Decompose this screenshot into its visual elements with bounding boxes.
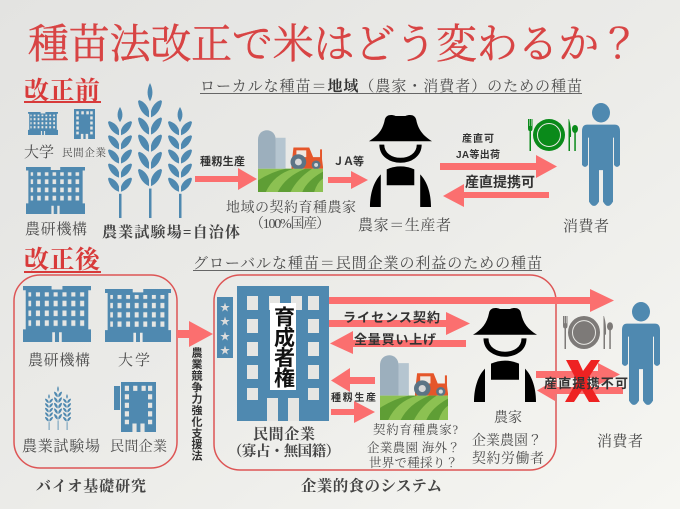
- arrow: seed production: [195, 168, 257, 190]
- icon: university: [28, 112, 58, 135]
- icon: university: [105, 289, 171, 342]
- heading: before revision: 改正前: [24, 77, 100, 105]
- label: breeder rights: 育成者権: [272, 306, 295, 388]
- panel: basic bio research: [14, 275, 177, 468]
- icon: stars sign: ★: [220, 303, 230, 314]
- arrow: direct from consumer blocked: [537, 380, 623, 401]
- icon: small wheat: [45, 386, 71, 430]
- icon: consumer: [622, 302, 660, 405]
- icon: grey plate: [563, 316, 613, 349]
- icon: stars sign: [217, 297, 233, 358]
- icon: research organization: [26, 167, 85, 214]
- label: total purchase: 全量買い上げ: [354, 332, 436, 347]
- label: seed production: 種籾生産: [200, 154, 245, 168]
- arrow: to breeder: [331, 401, 375, 423]
- icon: stars sign: ★: [220, 317, 230, 328]
- icon: stars sign: ★: [220, 346, 230, 357]
- icon: farmer: [369, 115, 432, 207]
- icon: farm: [258, 130, 323, 192]
- arrow: license contract: [329, 312, 470, 335]
- label: domestic 100%: （100%国産）: [250, 216, 330, 232]
- panel: before revision: [24, 77, 620, 241]
- arrow: long to consumer: [329, 289, 614, 312]
- label: direct sale allowed: 産直可: [462, 132, 494, 145]
- label: JA shipment: JA等出荷: [456, 148, 500, 161]
- icon: wheat: [108, 83, 192, 218]
- arrow: direct to consumer blocked: [536, 363, 620, 385]
- arrow: total purchase: [330, 331, 466, 354]
- label: university: 大学: [24, 144, 54, 161]
- icon: private company: [114, 382, 156, 432]
- label: seed collection worldwide: 世界で種採り？: [369, 455, 458, 470]
- subheading: local seeds: ローカルな種苗＝地域（農家・消費者）のための種苗: [200, 77, 582, 95]
- arrow: from consumer: [443, 184, 549, 207]
- label: private company: 民間企業: [62, 146, 106, 159]
- label: local contract breeder: 地域の契約育種農家: [226, 199, 356, 216]
- label: direct partnership not allowed: 産直提携不可: [544, 376, 628, 391]
- label: oligopoly stateless: （寡占・無国籍）: [228, 442, 340, 460]
- label: university: 大学: [118, 352, 150, 369]
- icon: corporate building: [237, 286, 329, 421]
- label: agricultural experiment station: 農業試験場=自治体: [102, 223, 240, 241]
- label: research organization: 農研機構: [25, 220, 87, 238]
- label: seed production: 種籾生産: [331, 391, 376, 404]
- label: private company: 民間企業: [253, 425, 315, 443]
- label: direct partnership allowed: 産直提携可: [465, 174, 535, 190]
- icon: green plate: [528, 119, 578, 151]
- subheading: global seeds: グローバルな種苗＝民間企業の利益のための種苗: [193, 255, 542, 272]
- icon: consumer: [582, 103, 620, 206]
- title: 種苗法改正で米はどう変わるか？: [28, 21, 640, 67]
- arrow: from breeder: [331, 368, 375, 392]
- label: private company: 民間企業: [110, 438, 167, 455]
- panel: after revision: [14, 246, 660, 495]
- arrow: support act: [177, 321, 213, 347]
- label: contract worker: 契約労働者: [472, 450, 544, 467]
- panel: corporate food system: [214, 275, 614, 470]
- icon: red X: [565, 360, 600, 402]
- icon: farmer: [473, 308, 537, 402]
- label: consumer: 消費者: [597, 432, 643, 450]
- icon: research organization: [23, 286, 91, 342]
- label: farmer: 農家: [494, 409, 522, 426]
- label: experiment station: 農業試験場: [22, 437, 100, 455]
- arrow: JA: [328, 171, 368, 189]
- label: research organization: 農研機構: [28, 351, 90, 369]
- label: contract breeder: 契約育種農家?: [373, 422, 458, 437]
- label: JA: ＪＡ等: [333, 154, 364, 168]
- label: consumer: 消費者: [563, 217, 609, 235]
- icon: stars sign: ★: [220, 332, 230, 343]
- label: agricultural competitiveness act: 農業競争力強化支援法: [190, 346, 202, 462]
- icon: private company small: [74, 109, 95, 139]
- label: license contract: ライセンス契約: [343, 310, 440, 325]
- arrow: to consumer: [440, 155, 557, 178]
- heading: after revision: 改正後: [24, 246, 101, 274]
- label: farmer producer: 農家＝生産者: [358, 216, 451, 234]
- icon: farm: [380, 355, 448, 420]
- label: corporate farm overseas: 企業農園 海外？: [367, 440, 460, 455]
- label: basic bio research: バイオ基礎研究: [36, 477, 146, 495]
- label: corporate farm: 企業農園？: [472, 432, 542, 449]
- label: corporate food system: 企業的食のシステム: [301, 476, 442, 495]
